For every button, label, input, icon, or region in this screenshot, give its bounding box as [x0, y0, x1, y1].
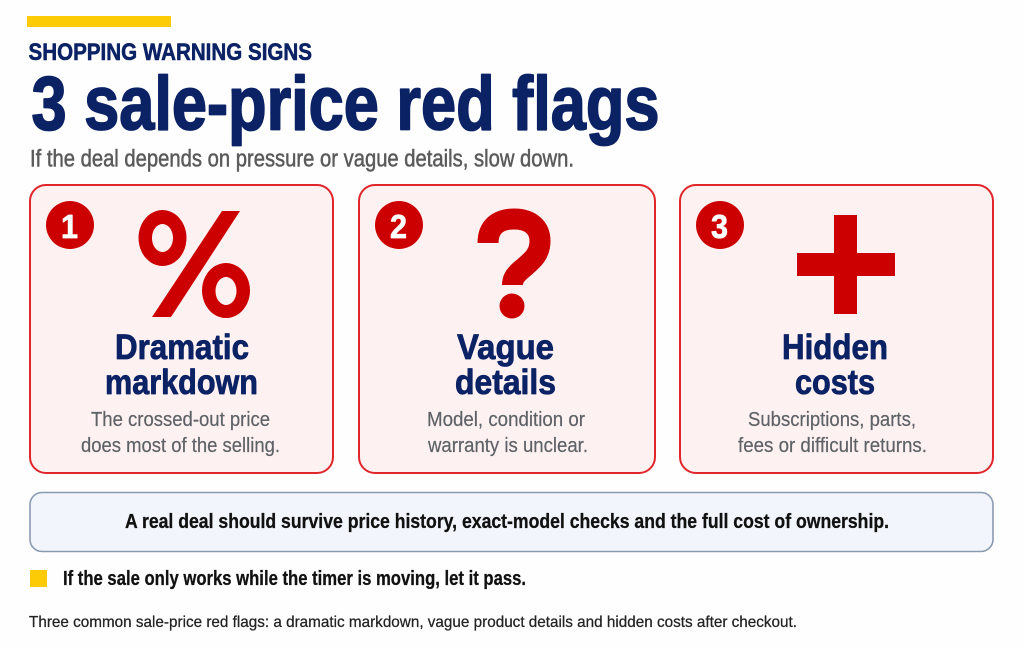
title: 3 sale-price red flags: [32, 62, 660, 146]
card heading: Dramatic: [115, 328, 249, 367]
card heading: Hidden: [782, 328, 888, 367]
card heading: costs: [795, 363, 875, 402]
card heading: [782, 328, 888, 402]
card description: fees or difficult returns.: [738, 435, 927, 457]
number badge 1: 1: [61, 208, 78, 245]
number badge 2: 2: [390, 208, 407, 245]
number badge 2: [375, 201, 423, 249]
icon: question mark: [488, 219, 540, 318]
panel: dramatic markdown: [30, 185, 333, 473]
callout: [30, 492, 993, 552]
card description: The crossed-out price: [91, 409, 270, 431]
card description: [738, 409, 927, 457]
card heading: [105, 328, 258, 402]
eyebrow heading: SHOPPING WARNING SIGNS: [28, 39, 312, 66]
panel: hidden costs: [680, 185, 993, 473]
tip text: If the sale only works while the timer is moving, let it pass.: [63, 568, 526, 590]
callout: A real deal should survive price history, exact-model checks and the full cost of ownership.: [125, 511, 889, 533]
card heading: details: [455, 363, 556, 402]
card description: [427, 409, 588, 457]
icon: yellow square: [30, 570, 47, 587]
card description: Model, condition or: [427, 409, 585, 431]
card description: does most of the selling.: [81, 435, 280, 457]
icon: percent sign: [139, 210, 250, 318]
card heading: Vague: [457, 328, 554, 367]
card description: warranty is unclear.: [427, 435, 588, 457]
footer caption: Three common sale-price red flags: a dramatic markdown, vague product details and hidden costs after checkout.: [29, 614, 797, 631]
tip: [30, 568, 526, 590]
accent bar: [27, 16, 171, 27]
number badge 3: [696, 201, 744, 249]
card heading: [455, 328, 556, 402]
panel: vague details: [359, 185, 655, 473]
number badge 3: 3: [711, 208, 728, 245]
card description: [81, 409, 280, 457]
number badge 1: [46, 201, 94, 249]
card heading: markdown: [105, 363, 258, 402]
subtitle: If the deal depends on pressure or vague details, slow down.: [30, 146, 574, 172]
icon: plus sign: [797, 215, 895, 314]
card description: Subscriptions, parts,: [748, 409, 916, 431]
